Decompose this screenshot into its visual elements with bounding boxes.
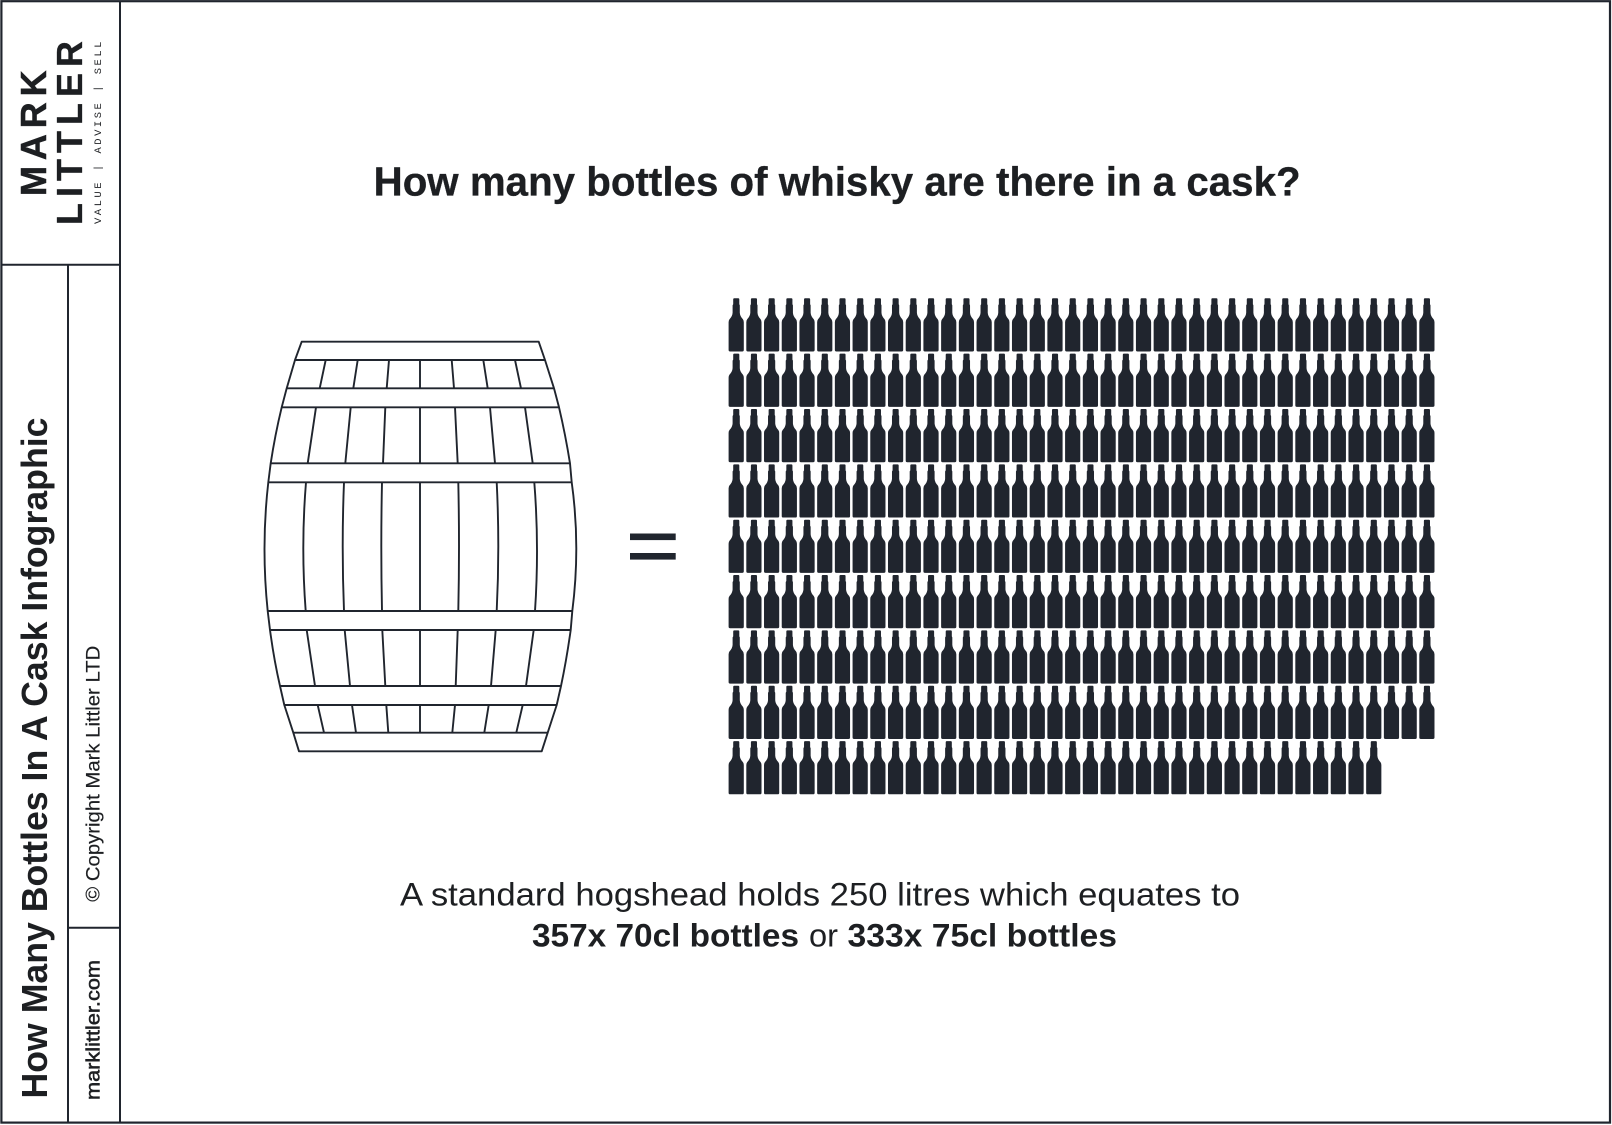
logo word: LITTLER: LITTLER bbox=[49, 41, 90, 225]
sidebar website: marklittler.com bbox=[82, 960, 104, 1100]
equals sign bbox=[630, 534, 676, 560]
barrel staves bbox=[303, 360, 537, 733]
caption line 1: A standard hogshead holds 250 litres which equates to bbox=[400, 877, 1240, 913]
barrel hoops bbox=[268, 360, 572, 733]
sidebar copyright: © Copyright Mark Littler LTD bbox=[84, 646, 104, 902]
sidebar heading: How Many Bottles In A Cask Infographic bbox=[14, 418, 55, 1098]
caption line 2: 75cl: 333x 75cl bottles bbox=[848, 918, 1117, 954]
title: How many bottles of whisky are there in a cask? bbox=[374, 159, 1301, 205]
caption line 2: 70cl: 357x 70cl bottles bbox=[532, 918, 799, 954]
sidebar logo: Mark Littler bbox=[13, 41, 105, 225]
barrel outline bbox=[264, 342, 576, 751]
caption line 2: or: or bbox=[809, 918, 838, 954]
logo word: MARK: MARK bbox=[13, 70, 54, 196]
icon: barrel bbox=[264, 342, 576, 751]
bottle grid: 357 bottles bbox=[729, 298, 1434, 794]
logo tagline: VALUE | ADVISE | SELL bbox=[93, 42, 105, 224]
caption bbox=[400, 877, 1240, 954]
